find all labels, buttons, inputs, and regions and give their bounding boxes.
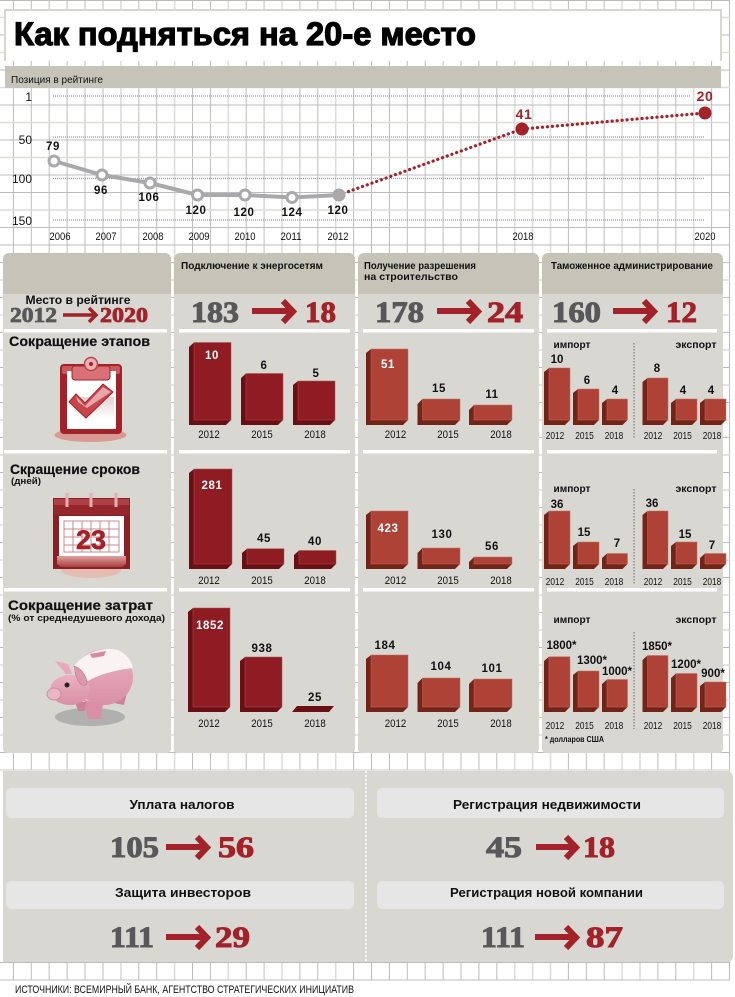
rank legend: 2012 [10, 303, 57, 327]
indicator: company registration [377, 881, 724, 954]
bar values: 40 [308, 536, 322, 548]
bar years [546, 576, 721, 588]
year labels: 2008 [142, 231, 164, 243]
value labels: 124 [282, 207, 302, 219]
bar values: 11 [485, 389, 499, 401]
bar years: 2012 [385, 429, 406, 441]
indicator: investor protection: Защита инвесторов [115, 885, 251, 900]
bar years: 2012 [546, 576, 564, 588]
bar 2012 [366, 349, 408, 425]
indicator: investor protection [6, 881, 354, 954]
bar 2018 [294, 550, 336, 569]
bar years: 2015 [437, 429, 459, 441]
title panel [5, 10, 721, 61]
bar years: 2012 [644, 576, 662, 588]
bar years: 2015 [437, 718, 459, 730]
bar values: 101 [482, 663, 502, 675]
bar 2015 [242, 549, 284, 569]
panel heading [364, 260, 476, 283]
bar values: 1852 [196, 620, 224, 632]
chart heading band [5, 66, 721, 88]
bar values [202, 480, 322, 548]
bar 2012 [189, 342, 231, 425]
panel: construction permits [358, 253, 539, 753]
indicator: taxes: Уплата налогов [130, 797, 234, 812]
rank change 183 to 18: 183 [191, 296, 239, 329]
bar values: 130 [432, 529, 452, 541]
bar years: 2015 [673, 720, 692, 732]
indicator: investor protection: 29 [215, 921, 250, 954]
indicator: investor protection: 111 [110, 921, 154, 954]
bar values: 423 [378, 523, 398, 535]
bar years: 2018 [490, 575, 512, 587]
bar values: 5 [312, 368, 320, 380]
year labels: 2020 [694, 231, 716, 243]
bar values: 1000* [602, 666, 633, 678]
bars [544, 511, 726, 569]
bar 2012 [188, 608, 230, 712]
year labels: 2012 [328, 231, 348, 243]
rank change 178 to 24: 24 [487, 296, 523, 329]
bar values: 45 [257, 533, 271, 545]
bar values [378, 523, 499, 553]
indicator: company registration: 111 [481, 921, 525, 954]
value labels: 79 [46, 141, 60, 153]
bar values: 184 [374, 640, 396, 652]
bar values: 1800* [546, 640, 577, 652]
icon: clipboard [54, 358, 126, 442]
bar values [374, 640, 502, 675]
value labels: 120 [328, 205, 348, 217]
rank legend [10, 295, 148, 327]
import label: импорт [554, 339, 590, 351]
bar years: 2018 [605, 576, 623, 588]
export label: экспорт [676, 339, 716, 351]
value labels: 120 [186, 205, 206, 217]
panel heading: на строительство [364, 271, 458, 283]
bar values: 4 [680, 385, 687, 397]
row subheading: days: (дней) [11, 476, 41, 487]
value labels: 106 [138, 192, 160, 204]
bar years: 2018 [703, 576, 721, 588]
bar 2012 [366, 655, 408, 712]
row heading: costs: Сокращение затрат [8, 597, 153, 613]
bar values [551, 498, 715, 552]
forecast dotted line [339, 113, 705, 195]
historical line [54, 161, 339, 198]
value labels [46, 88, 713, 219]
bar values: 281 [202, 480, 222, 492]
panel: customs [542, 253, 726, 753]
y axis labels: 50 [19, 133, 32, 147]
bar 2018 [469, 557, 512, 569]
indicator: company registration: Регистрация новой компании [450, 885, 643, 900]
bar values: 104 [430, 661, 452, 673]
bar chart: costs [544, 614, 726, 732]
panel heading: Подключение к энергосетям [181, 260, 323, 272]
bar years: 2018 [304, 575, 326, 587]
bar values: 56 [485, 541, 499, 553]
indicator: property registration [377, 788, 724, 864]
sources: ИСТОЧНИКИ: ВСЕМИРНЫЙ БАНК, АГЕНТСТВО СТРАТЕГИЧЕСКИХ ИНИЦИАТИВ [15, 983, 354, 996]
indicator: property registration: 18 [583, 831, 615, 864]
value labels: 120 [234, 207, 254, 219]
rank change 160 to 12: 12 [666, 296, 697, 329]
year labels: 2010 [234, 231, 256, 243]
bar years: 2015 [673, 576, 692, 588]
bar years [198, 718, 326, 730]
y axis labels: 100 [12, 172, 32, 186]
bar 2015 [241, 374, 283, 425]
year labels [50, 231, 716, 243]
bar years: 2015 [673, 430, 692, 442]
bar values: 4 [708, 385, 715, 397]
bar years: 2012 [198, 429, 220, 441]
y axis labels: 1 [25, 90, 32, 104]
y axis labels [12, 90, 32, 228]
rank legend: 2020 [100, 303, 148, 327]
footnote: * долларов США [545, 734, 604, 744]
row subheading: share of income: (% от среднедушевого дохода) [8, 613, 165, 624]
bar years [385, 429, 512, 441]
bar years: 2015 [575, 720, 594, 732]
bar 2018 [469, 679, 512, 712]
year labels: 2018 [512, 231, 534, 243]
bar years [198, 429, 326, 441]
import label: импорт [554, 614, 590, 626]
bar values [546, 640, 725, 680]
bar years: 2018 [605, 430, 623, 442]
value labels: 41 [516, 106, 532, 122]
y axis labels: 150 [12, 214, 32, 228]
bar years: 2012 [198, 575, 220, 587]
bar values: 36 [646, 498, 658, 510]
year labels: 2009 [188, 231, 210, 243]
bar years: 2015 [575, 430, 594, 442]
panel: row labels [3, 253, 171, 753]
bar values: 36 [551, 499, 563, 511]
bar values: 10 [205, 350, 219, 362]
export label: экспорт [676, 483, 716, 495]
bar years [546, 720, 721, 732]
rank change 183 to 18: 18 [305, 296, 336, 329]
indicator: company registration: 87 [586, 921, 623, 954]
panel: other indicators [3, 771, 733, 962]
bar years [546, 430, 721, 442]
bar 2012 [366, 511, 408, 569]
indicator: taxes: 56 [218, 831, 254, 864]
bar values [551, 354, 715, 397]
bar chart: steps [544, 339, 726, 442]
value labels: 96 [94, 185, 108, 197]
bar 2018 [293, 381, 335, 425]
bar 2015 [418, 399, 460, 425]
bar years [385, 575, 512, 587]
row heading: steps: Сокращение этапов [9, 333, 150, 349]
bar chart: costs [188, 608, 334, 730]
bar years: 2018 [490, 718, 512, 730]
bar chart: steps [189, 342, 335, 441]
bar years: 2015 [437, 575, 459, 587]
bar values: 1200* [671, 659, 702, 671]
chart heading band: Позиция в рейтинге [11, 75, 103, 86]
rank change 178 to 24: 178 [375, 296, 424, 329]
bar chart: steps [366, 349, 512, 441]
bar values: 4 [612, 385, 619, 397]
bar years: 2012 [546, 720, 564, 732]
bar years: 2012 [198, 718, 220, 730]
bar years: 2018 [703, 720, 721, 732]
import and export dividers [633, 343, 635, 729]
bar values: 7 [709, 540, 715, 552]
rank change 178 to 24 [375, 296, 523, 329]
bar years: 2012 [385, 718, 406, 730]
bar years: 2012 [385, 575, 406, 587]
bar years: 2018 [304, 718, 326, 730]
bar years [385, 718, 512, 730]
icon: calendar: 23 [76, 525, 106, 555]
bar values: 10 [551, 354, 563, 366]
panel heading: Получение разрешения [364, 260, 476, 272]
bar years: 2012 [546, 430, 564, 442]
bar values: 51 [381, 359, 395, 371]
bar values: 15 [578, 527, 591, 539]
bar values: 6 [260, 360, 268, 372]
bar years [198, 575, 326, 587]
bar 2015 [418, 548, 460, 569]
bar values: 938 [252, 643, 272, 655]
bar values: 25 [308, 692, 322, 704]
rank legend: Место в рейтинге [26, 295, 130, 307]
bar values: 7 [614, 538, 620, 550]
import label: импорт [554, 483, 590, 495]
indicator: property registration: Регистрация недвижимости [453, 797, 641, 812]
bar chart: time [189, 469, 336, 587]
bar 2015 [418, 678, 460, 712]
bar values: 15 [679, 529, 692, 541]
forecast points [516, 106, 712, 136]
year labels: 2006 [50, 231, 70, 243]
bar 2018 [469, 405, 512, 425]
bar years: 2015 [575, 576, 594, 588]
indicator: taxes [6, 788, 354, 864]
bar chart: time [366, 511, 512, 587]
bar years: 2018 [703, 430, 721, 442]
historical points [49, 156, 346, 202]
bar values: 1850* [642, 641, 673, 653]
panel heading: Таможенное администрирование [551, 260, 713, 272]
bar years: 2018 [304, 429, 326, 441]
year labels: 2007 [96, 231, 116, 243]
rank change 160 to 12 [552, 296, 697, 329]
bar 2018 [292, 706, 334, 712]
chart gridlines [53, 96, 705, 220]
bar values [205, 350, 320, 380]
indicator: taxes: 105 [110, 831, 159, 864]
bar chart: time [544, 483, 726, 588]
bar values: 900* [701, 668, 725, 680]
bar years: 2015 [251, 429, 273, 441]
bars [544, 656, 726, 712]
bar chart: costs [366, 640, 512, 730]
bar years: 2012 [644, 720, 662, 732]
rank change 160 to 12: 160 [552, 296, 601, 329]
bars [544, 368, 726, 425]
icon: calendar [53, 493, 130, 578]
bar values [196, 620, 322, 704]
bar years: 2018 [490, 429, 512, 441]
value labels: 20 [697, 88, 713, 104]
bar values: 15 [432, 383, 446, 395]
rank change 183 to 18 [191, 296, 336, 329]
bar values: 1300* [577, 655, 608, 667]
title: Как подняться на 20-е место [14, 16, 476, 52]
bar values: 8 [654, 363, 661, 375]
bar years: 2015 [251, 718, 273, 730]
bar years: 2015 [251, 575, 273, 587]
bar 2015 [240, 657, 282, 712]
bar 2012 [189, 469, 232, 569]
panel: electricity [174, 253, 355, 753]
bar years: 2012 [644, 430, 662, 442]
icon: piggy bank [47, 649, 133, 726]
line chart: position in ranking [12, 88, 716, 243]
indicator: property registration: 45 [486, 831, 522, 864]
row heading: time: Скращение сроков [10, 461, 140, 477]
export label: экспорт [676, 614, 716, 626]
bar values: 6 [584, 375, 590, 387]
year labels: 2011 [280, 231, 302, 243]
bar values [381, 359, 499, 401]
bar years: 2018 [605, 720, 623, 732]
